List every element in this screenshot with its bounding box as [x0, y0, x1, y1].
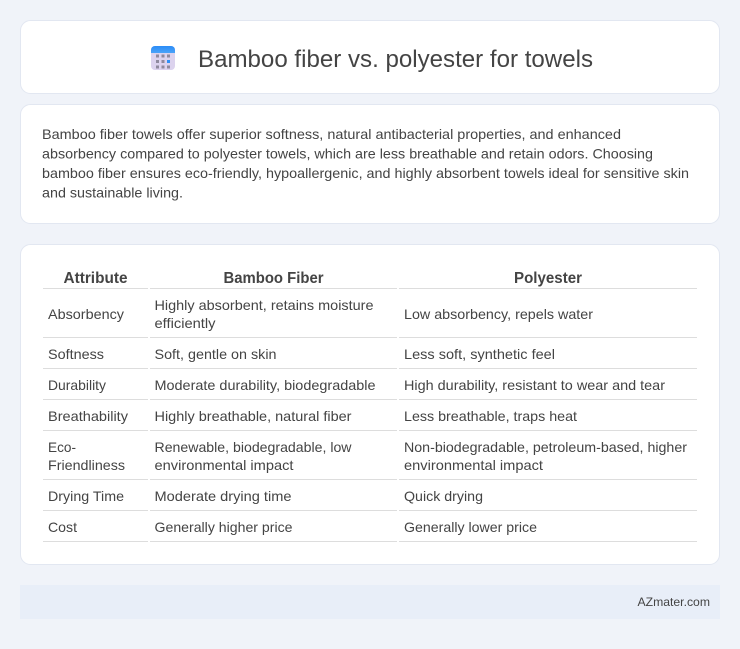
row: breathability: Breathability	[48, 408, 128, 424]
row: softness	[48, 346, 555, 362]
row: cost	[48, 519, 537, 535]
row: softness: Less soft, synthetic feel	[404, 346, 555, 362]
row: drying time: Moderate drying time	[154, 488, 292, 504]
row: eco-friendliness: Eco-	[48, 439, 76, 455]
row: durability	[48, 377, 665, 393]
panel: summary	[20, 104, 720, 224]
row: softness: Soft, gentle on skin	[154, 346, 276, 362]
row: eco-friendliness	[48, 439, 687, 473]
panel: title	[20, 20, 720, 94]
row: eco-friendliness: Renewable, biodegradable, low	[154, 439, 352, 455]
row: eco-friendliness: Non-biodegradable, petroleum-based, higher	[404, 439, 687, 455]
row: durability: Moderate durability, biodegradable	[154, 377, 376, 393]
row: drying time	[48, 488, 483, 504]
row: cost: Generally lower price	[404, 519, 537, 535]
row: softness: Softness	[48, 346, 104, 362]
panel: comparison table	[20, 244, 720, 564]
table header: Attribute	[64, 270, 128, 287]
row: breathability	[48, 408, 577, 424]
row: durability: High durability, resistant to wear and tear	[404, 377, 665, 393]
row: breathability: Highly breathable, natural fiber	[154, 408, 352, 424]
row: absorbency: Highly absorbent, retains moisture	[154, 297, 374, 313]
footer bar	[20, 585, 720, 619]
table header: Polyester	[514, 270, 582, 287]
title text: Bamboo fiber vs. polyester for towels	[198, 46, 593, 73]
row: eco-friendliness: environmental impact	[154, 457, 294, 473]
table header: Bamboo Fiber	[224, 270, 324, 287]
row: absorbency	[48, 297, 593, 331]
row: cost: Cost	[48, 519, 77, 535]
row: durability: Durability	[48, 377, 106, 393]
table rules	[43, 288, 697, 542]
icon: calendar	[151, 46, 175, 70]
row: eco-friendliness: environmental impact	[404, 457, 543, 473]
table header	[64, 270, 582, 287]
row: drying time: Quick drying	[404, 488, 483, 504]
summary text: and sustainable living.	[42, 184, 183, 200]
summary text: absorbency compared to polyester towels, which are less breathable and retain odors. Choosing	[42, 146, 653, 162]
row: drying time: Drying Time	[48, 488, 124, 504]
row: absorbency: efficiently	[154, 315, 216, 331]
row: absorbency: Low absorbency, repels water	[404, 306, 593, 322]
row: breathability: Less breathable, traps heat	[404, 408, 577, 424]
row: eco-friendliness: Friendliness	[48, 457, 125, 473]
footer credit: AZmater.com	[638, 595, 710, 609]
summary text: bamboo fiber ensures eco-friendly, hypoallergenic, and highly absorbent towels ideal for sensitive skin	[42, 165, 689, 181]
row: absorbency: Absorbency	[48, 306, 124, 322]
summary text	[42, 126, 689, 200]
row: cost: Generally higher price	[154, 519, 293, 535]
summary text: Bamboo fiber towels offer superior softness, natural antibacterial properties, and enhanced	[42, 126, 621, 142]
